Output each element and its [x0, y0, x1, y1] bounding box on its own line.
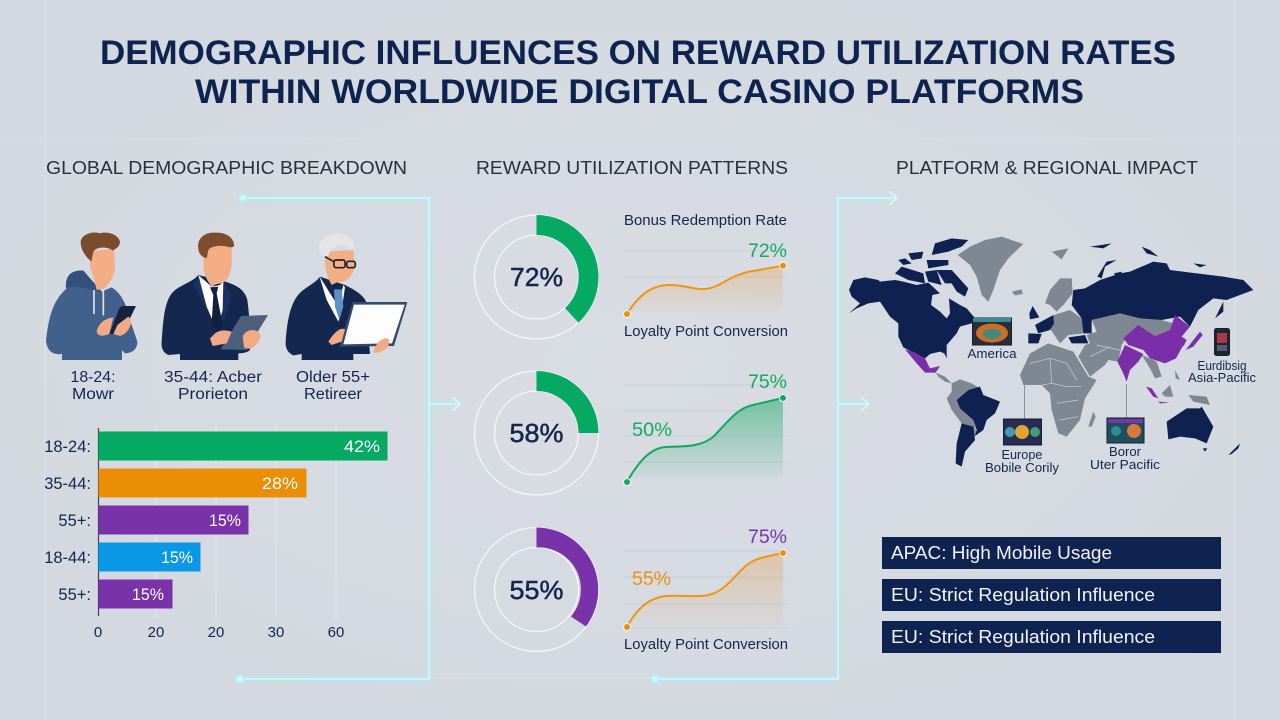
persona captions: Retireer	[304, 386, 362, 403]
persona captions: Mowr	[72, 386, 114, 403]
map thumbnail: europe	[1004, 384, 1042, 445]
bar labels: 55+:	[58, 512, 91, 530]
map labels	[968, 347, 1256, 475]
persona captions	[70, 369, 370, 403]
connector lines with arrows	[236, 191, 897, 682]
bar: 35-44	[98, 468, 306, 498]
persona captions: 35-44: Acber	[164, 369, 262, 386]
bar labels: 18-44:	[44, 549, 91, 567]
donut: 58%: 58%	[510, 418, 564, 448]
bar: 55+ second: 15%	[132, 585, 164, 604]
icon: adult with tablet	[162, 233, 268, 360]
map labels: Bobile Corily	[985, 461, 1060, 475]
title	[100, 34, 1176, 111]
panel: global demographic breakdown	[44, 157, 407, 641]
axis labels: 30	[268, 624, 284, 641]
callout: EU regulation	[882, 579, 1221, 611]
line chart: loyalty conversion orange: 55%	[632, 569, 671, 590]
bar: 55+ second	[98, 580, 172, 608]
line chart: bonus redemption: 72%	[748, 241, 787, 262]
icon: older person with tablet	[286, 234, 407, 360]
map thumbnail: phone	[1214, 328, 1230, 356]
line chart: loyalty conversion green: 75%	[748, 372, 787, 393]
title: WITHIN WORLDWIDE DIGITAL CASINO PLATFORMS	[195, 73, 1084, 111]
map labels: Asia-Pacific	[1188, 371, 1256, 385]
map: eurasia, africa and oceania	[1020, 243, 1253, 455]
panel: reward utilization patterns	[474, 157, 788, 653]
line chart: loyalty conversion green	[624, 372, 787, 486]
bar: 18-44	[98, 542, 200, 572]
donut: 72%	[474, 215, 598, 339]
persona captions: Prorieton	[178, 386, 248, 403]
bar: 35-44: 28%	[262, 474, 298, 493]
axis labels: 20	[148, 624, 164, 641]
donut: 55%	[474, 528, 598, 652]
map thumbnail: america	[972, 318, 1012, 345]
line chart: loyalty conversion orange	[624, 527, 788, 653]
heading: demographic: GLOBAL DEMOGRAPHIC BREAKDOWN	[46, 157, 407, 178]
bar chart	[44, 425, 388, 641]
map thumbnail: pacific	[1107, 384, 1144, 443]
personas	[46, 233, 407, 360]
bar: 18-24	[98, 432, 388, 460]
persona captions: Older 55+	[296, 369, 370, 386]
line chart: loyalty conversion orange: Loyalty Point Conversion	[624, 637, 788, 653]
world map	[849, 237, 1253, 467]
map labels: Europe	[1002, 448, 1043, 462]
map labels: America	[968, 347, 1017, 361]
heading: platform: PLATFORM & REGIONAL IMPACT	[896, 157, 1198, 178]
line chart: bonus redemption: Bonus Redemption Rate	[624, 213, 787, 229]
axis labels: 60	[328, 624, 344, 641]
bar: 18-44: 15%	[161, 548, 193, 567]
axis labels: 0	[94, 624, 102, 641]
title: DEMOGRAPHIC INFLUENCES ON REWARD UTILIZATION RATES	[100, 34, 1176, 72]
bar labels: 18-24:	[44, 438, 91, 456]
donut: 72%: 72%	[510, 262, 563, 292]
bar labels	[44, 438, 91, 604]
axis labels	[94, 624, 344, 641]
bar labels: 35-44:	[44, 475, 91, 493]
line chart: bonus redemption: Loyalty Point Conversion	[624, 324, 788, 340]
heading: reward: REWARD UTILIZATION PATTERNS	[476, 157, 788, 178]
bar: 55+	[98, 506, 248, 534]
callout: APAC: APAC: High Mobile Usage	[891, 543, 1112, 563]
line chart: loyalty conversion orange: 75%	[748, 527, 787, 548]
bar labels: 55+:	[58, 586, 91, 604]
bar: 18-24: 42%	[344, 437, 380, 456]
map: americas and greenland	[849, 237, 1023, 467]
line chart: bonus redemption	[624, 213, 788, 340]
callout: EU regulation repeat: EU: Strict Regulation Influence	[891, 627, 1155, 647]
map labels: Eurdibsig	[1198, 359, 1247, 373]
line chart: loyalty conversion green: 50%	[632, 420, 672, 441]
donut: 55%: 55%	[510, 575, 564, 605]
callout: APAC	[882, 537, 1221, 569]
icon: young person with phone	[46, 233, 137, 360]
map labels: Uter Pacific	[1090, 458, 1160, 472]
bar: 55+: 15%	[209, 511, 241, 530]
persona captions: 18-24:	[70, 369, 116, 386]
callout: EU regulation: EU: Strict Regulation Influence	[891, 585, 1155, 605]
donut: 58%	[474, 371, 598, 495]
axis labels: 20	[208, 624, 224, 641]
map labels: Boror	[1109, 445, 1141, 459]
callout: EU regulation repeat	[882, 621, 1221, 653]
panel: platform and regional impact	[849, 157, 1256, 653]
